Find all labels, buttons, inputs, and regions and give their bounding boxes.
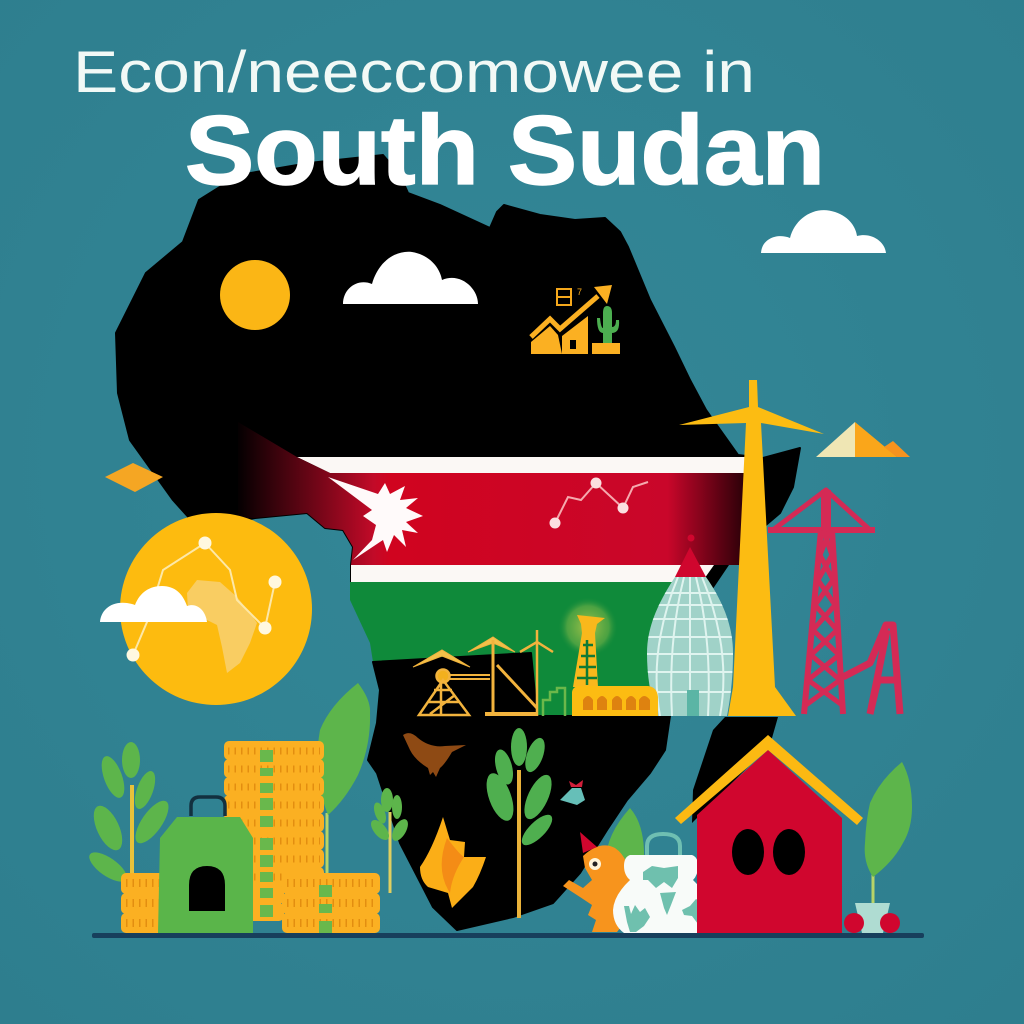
windmill [520, 630, 553, 716]
icon: orange creature [563, 832, 630, 932]
rig one [413, 650, 490, 715]
dome red cap [675, 547, 706, 577]
ground line [92, 933, 924, 938]
globe Africa shape [187, 580, 257, 673]
icon: cloud on map [343, 252, 478, 304]
dome grid [647, 577, 733, 716]
jar map blobs [624, 866, 704, 932]
globe cloud [100, 586, 207, 622]
industry: oil rigs and factory [413, 597, 658, 716]
title [73, 40, 825, 205]
factory [572, 686, 658, 716]
map lower black [368, 653, 670, 930]
icon: sun on map [220, 260, 290, 330]
rig two [468, 637, 538, 714]
dome door [687, 690, 699, 716]
icon: growth chart [531, 285, 620, 354]
flag white band bottom [351, 565, 714, 582]
big coin stack [224, 741, 324, 921]
icon: green bag [158, 797, 253, 933]
flag red band [238, 422, 750, 565]
icon: growth chart: 7 [577, 287, 582, 297]
icon: flag star [328, 477, 423, 560]
small green building [543, 688, 565, 716]
coin stacks [121, 741, 380, 933]
flag white band top [297, 457, 746, 473]
globe chart [100, 513, 312, 705]
icon: green leaf behind jar [606, 808, 644, 860]
glow behind lighthouse [558, 597, 618, 657]
icon: flame [420, 817, 486, 908]
icon: jar with map [613, 834, 709, 933]
title line two: South Sudan [185, 95, 825, 205]
icon: large leaf [317, 683, 370, 876]
icon: small plant [368, 788, 411, 893]
pylon: red transmission tower [768, 490, 900, 714]
tower: yellow wind mast [679, 380, 824, 716]
icon: pyramids [816, 422, 910, 457]
title line one: Econ/neeccomowee in [73, 40, 755, 105]
icon: potted plant [844, 762, 912, 933]
lighthouse tower [573, 615, 605, 687]
icon: brown bird [403, 733, 466, 777]
icon: left plant [85, 742, 175, 887]
globe line chart [126, 536, 282, 662]
flag green band [350, 582, 700, 716]
icon: cloud top right [761, 210, 886, 253]
icon: map tree [481, 728, 557, 918]
map: Africa silhouette with flag bands [116, 155, 800, 930]
creature hat [580, 832, 597, 853]
map black fragment behind house [692, 717, 778, 823]
creature eye [589, 858, 601, 870]
icon: red house [675, 735, 863, 933]
map upper black [116, 155, 800, 587]
line chart on flag [550, 478, 648, 528]
right coin stack [282, 873, 380, 933]
factory arches [583, 696, 650, 710]
icon: small bird [560, 780, 585, 805]
left coin stack [121, 873, 171, 933]
dome building [647, 534, 733, 716]
icon: diamond kite left [105, 463, 163, 492]
